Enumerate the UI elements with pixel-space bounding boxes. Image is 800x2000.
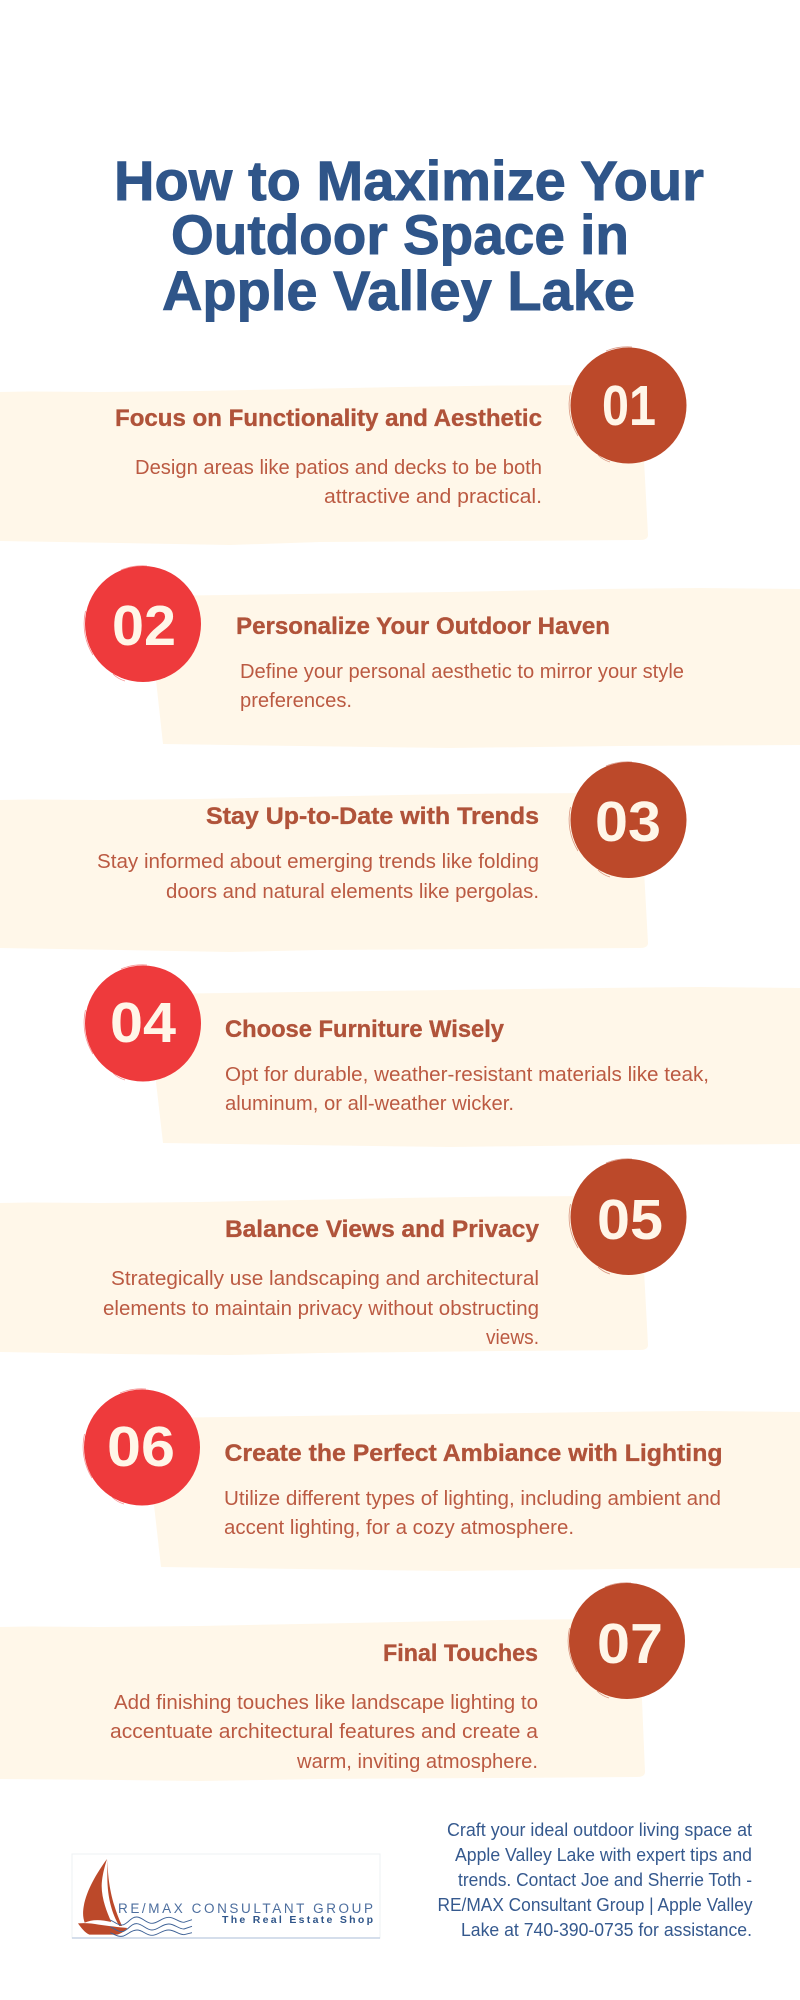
number badge: 05: 05 — [597, 1188, 663, 1252]
number badge: 03 — [569, 762, 686, 878]
number badge: 04 — [84, 965, 201, 1082]
heading: step 02: Personalize Your Outdoor Haven — [236, 613, 610, 640]
body: step 04: aluminum, or all-weather wicker. — [225, 1093, 514, 1115]
panel: step 01 — [0, 385, 648, 545]
footer text: trends. Contact Joe and Sherrie Toth - — [458, 1870, 752, 1890]
body: step 07 — [110, 1692, 539, 1773]
body: step 05: Strategically use landscaping and architectural — [111, 1268, 539, 1290]
body: step 01 — [135, 457, 542, 508]
body: step 04: Opt for durable, weather-resistant materials like teak, — [225, 1064, 709, 1086]
panel: step 05 — [0, 1196, 648, 1355]
footer text — [438, 1820, 752, 1940]
body: step 02 — [240, 661, 684, 712]
footer text: Apple Valley Lake with expert tips and — [455, 1845, 752, 1865]
body: step 05: elements to maintain privacy without obstructing — [103, 1298, 539, 1320]
body: step 05 — [103, 1268, 539, 1349]
number badge: 06 — [83, 1389, 200, 1506]
body: step 02: Define your personal aesthetic to mirror your style — [240, 661, 684, 683]
body: step 07: accentuate architectural features and create a — [110, 1721, 539, 1743]
heading: step 01: Focus on Functionality and Aesthetic — [115, 405, 542, 432]
title: Apple Valley Lake — [162, 259, 635, 322]
panel: step 02 — [150, 588, 800, 748]
heading: step 05: Balance Views and Privacy — [225, 1216, 540, 1243]
panel: step 04 — [150, 987, 800, 1147]
number badge: 02 — [84, 566, 201, 682]
number badge: 03: 03 — [595, 790, 661, 854]
number badge: 06: 06 — [107, 1415, 175, 1479]
logo text: The Real Estate Shop — [222, 1914, 373, 1926]
body: step 05: views. — [486, 1327, 539, 1349]
body: step 06 — [224, 1488, 721, 1539]
panel: step 07 — [0, 1619, 645, 1781]
heading: step 07: Final Touches — [383, 1640, 538, 1667]
number badge: 01: 01 — [602, 374, 656, 438]
body: step 07: warm, inviting atmosphere. — [296, 1751, 538, 1773]
body: step 03: doors and natural elements like pergolas. — [166, 881, 539, 903]
heading: step 06: Create the Perfect Ambiance with Lighting — [224, 1440, 722, 1467]
title — [114, 149, 704, 322]
footer text: Lake at 740-390-0735 for assistance. — [461, 1920, 752, 1940]
body: step 06: Utilize different types of lighting, including ambient and — [224, 1488, 721, 1510]
footer text: Craft your ideal outdoor living space at — [447, 1820, 752, 1840]
heading: step 03: Stay Up-to-Date with Trends — [206, 803, 539, 830]
body: step 03: Stay informed about emerging trends like folding — [97, 851, 539, 873]
icon: sailboat — [78, 1859, 127, 1935]
footer text: RE/MAX Consultant Group | Apple Valley — [438, 1895, 752, 1915]
body: step 02: preferences. — [240, 690, 352, 712]
icon: waves — [110, 1917, 192, 1936]
body: step 01: Design areas like patios and decks to be both — [135, 457, 542, 479]
number badge: 07 — [568, 1583, 685, 1699]
panel: step 03 — [0, 793, 648, 952]
title: How to Maximize Your — [114, 149, 704, 212]
title: Outdoor Space in — [171, 203, 629, 266]
body: step 03 — [97, 851, 539, 903]
logo: RE/MAX Consultant Group — [72, 1854, 380, 1938]
number badge: 02: 02 — [112, 594, 176, 658]
panel: step 06 — [148, 1411, 800, 1571]
logo text: RE/MAX CONSULTANT GROUP — [118, 1901, 373, 1916]
number badge: 05 — [569, 1159, 686, 1275]
logo text — [118, 1901, 373, 1926]
heading: step 04: Choose Furniture Wisely — [225, 1016, 505, 1043]
number badge: 01 — [569, 347, 686, 464]
body: step 04 — [225, 1064, 709, 1115]
body: step 06: accent lighting, for a cozy atmosphere. — [224, 1517, 574, 1539]
number badge: 07: 07 — [597, 1612, 663, 1676]
body: step 01: attractive and practical. — [324, 486, 542, 508]
body: step 07: Add finishing touches like landscape lighting to — [114, 1692, 538, 1714]
number badge: 04: 04 — [110, 991, 176, 1055]
